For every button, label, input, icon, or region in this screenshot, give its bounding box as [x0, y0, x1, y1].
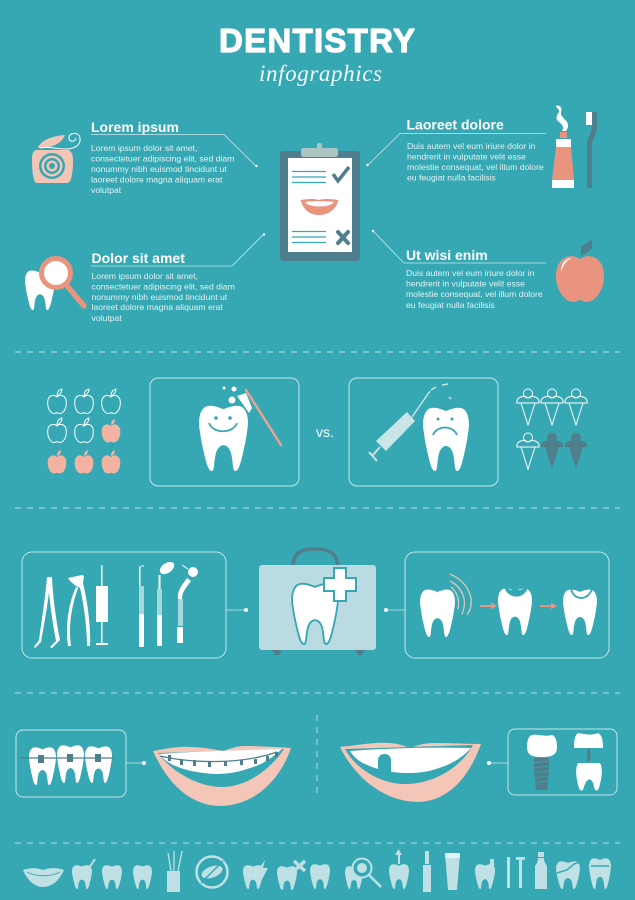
connector [487, 761, 508, 765]
text block: Lorem ipsum: volutpat [91, 185, 122, 195]
icon: toothbrush [586, 112, 597, 188]
text block: Dolor sit amet: Lorem ipsum dolor sit amet, [92, 271, 198, 281]
text block: Ut wisi enim: eu feugiat nulla facilisis [406, 300, 495, 310]
text block: Dolor sit amet: Dolor sit amet [92, 250, 185, 266]
panel: tooth decay stages [405, 552, 609, 658]
title: DENTISTRY [219, 22, 415, 59]
text block: Ut wisi enim [372, 230, 546, 310]
vs label: vs. [316, 424, 334, 440]
text block: Dolor sit amet: volutpat [92, 313, 122, 323]
icon: toothpaste [552, 105, 574, 188]
text block: Laoreet dolore: hendrerit in vulputate velit esse [407, 152, 526, 162]
icon: first aid case [259, 549, 376, 655]
icon: lips [23, 868, 64, 887]
icon grid: apples [48, 389, 120, 474]
icon row: dental set [23, 849, 611, 892]
smile with braces [153, 746, 291, 806]
icon: tooth under magnifier [25, 258, 84, 310]
connector [126, 761, 146, 765]
text block: Ut wisi enim: molestie consequat, vel illum dolore [406, 289, 543, 299]
text block: Lorem ipsum [91, 119, 258, 195]
icon grid: ice creams [517, 389, 587, 469]
text block: Lorem ipsum: consectetuer adipiscing elit, sed diam [91, 154, 234, 164]
connector [226, 608, 248, 612]
text block: Dolor sit amet: laoreet dolore magna aliquam erat [92, 302, 223, 312]
text block: Dolor sit amet [91, 233, 265, 323]
text block: Dolor sit amet: consectetuer adipiscing elit, sed diam [92, 282, 235, 292]
text block: Laoreet dolore: Duis autem vel eum iriure dolor in [407, 141, 536, 151]
smile with missing tooth [340, 743, 481, 802]
text block: Lorem ipsum: Lorem ipsum [91, 119, 179, 135]
text block: Ut wisi enim: hendrerit in vulputate velit esse [406, 278, 525, 288]
text block: Laoreet dolore: eu feugiat nulla facilisis [407, 172, 496, 182]
text block: Laoreet dolore [366, 116, 546, 182]
text block: Dolor sit amet: nonummy nibh euismod tincidunt ut [92, 292, 228, 302]
text block: Lorem ipsum: nonummy nibh euismod tincidunt ut [91, 164, 227, 174]
text block: Ut wisi enim: Duis autem vel eum iriure dolor in [406, 268, 535, 278]
subtitle: infographics [259, 61, 382, 86]
icon: clipboard checklist [280, 143, 360, 261]
text block: Lorem ipsum: laoreet dolore magna aliquam erat [91, 174, 223, 184]
connector [384, 608, 405, 612]
text block: Lorem ipsum: Lorem ipsum dolor sit amet, [91, 143, 197, 153]
panel: happy tooth [150, 378, 299, 486]
icon: dental floss [32, 133, 80, 183]
text block: Laoreet dolore: Laoreet dolore [406, 116, 504, 132]
panel: braces teeth [16, 730, 126, 797]
panel: sad tooth [349, 378, 498, 486]
text block: Ut wisi enim: Ut wisi enim [406, 247, 488, 263]
panel: dental implant [508, 729, 617, 795]
text block: Laoreet dolore: molestie consequat, vel illum dolore [407, 162, 544, 172]
panel: dental tools [22, 552, 226, 658]
icon: apple [556, 239, 604, 302]
